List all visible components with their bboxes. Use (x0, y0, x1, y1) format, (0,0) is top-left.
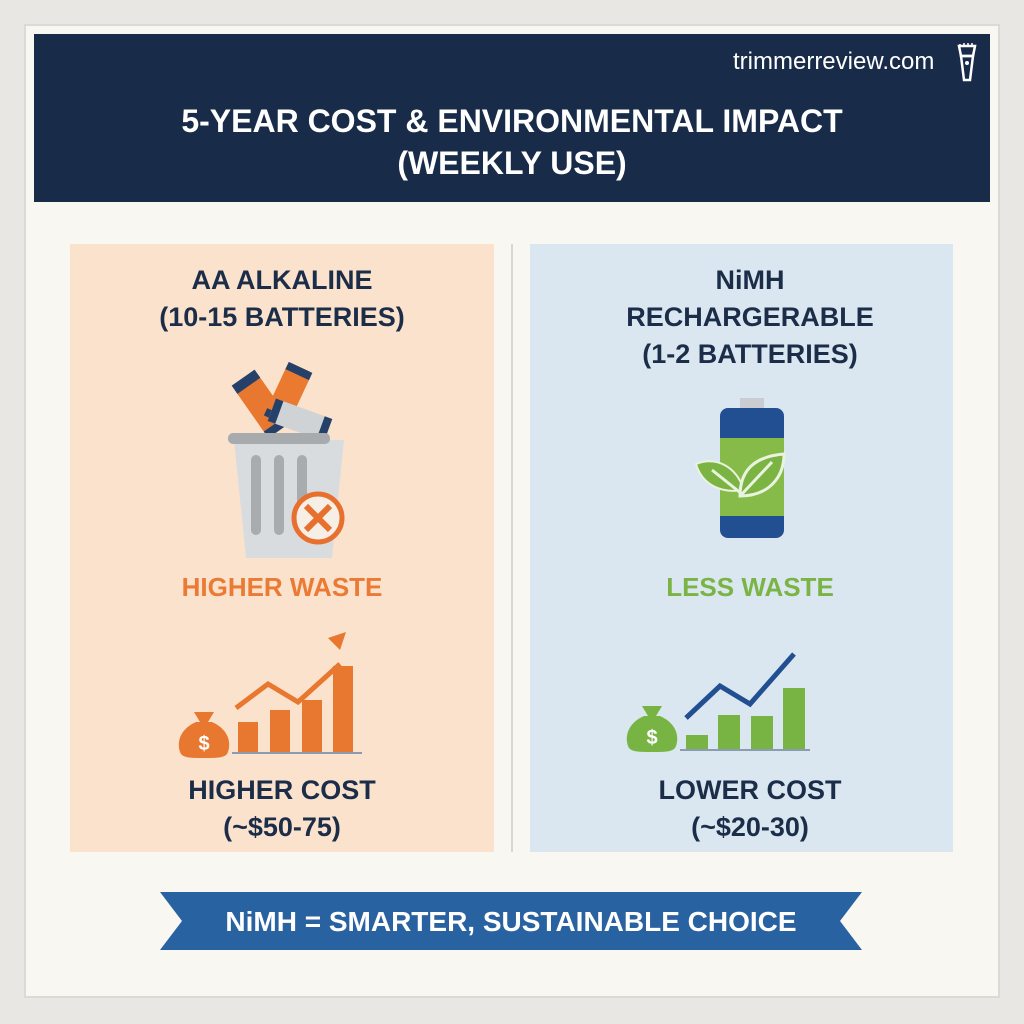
label: lower cost: (~$20-30) (691, 812, 809, 842)
label: less waste: LESS WASTE (666, 572, 834, 602)
title: (WEEKLY USE) (397, 145, 627, 181)
heading (626, 265, 874, 369)
icon: trimmer (958, 43, 976, 82)
heading: NiMH (716, 265, 784, 295)
heading (159, 265, 405, 332)
header (34, 34, 990, 202)
heading: (1-2 BATTERIES) (642, 339, 858, 369)
label: higher waste: HIGHER WASTE (182, 572, 382, 602)
heading: RECHARGERABLE (626, 302, 874, 332)
chart: rising cost (178, 632, 362, 758)
banner (160, 892, 862, 950)
icon: trash with batteries (228, 362, 344, 558)
title (181, 103, 843, 181)
logo: trimmerreview.com (733, 48, 934, 75)
panel: alkaline (70, 244, 494, 852)
chart: lower cost: $ (646, 727, 658, 749)
logo (733, 43, 976, 82)
heading: (10-15 BATTERIES) (159, 302, 405, 332)
chart: rising cost: $ (198, 733, 210, 755)
chart: lower cost (626, 652, 810, 752)
icon: eco battery (695, 398, 786, 538)
heading: AA ALKALINE (192, 265, 372, 295)
label: higher cost: (~$50-75) (223, 812, 341, 842)
label: higher cost (188, 775, 376, 842)
label: lower cost (658, 775, 842, 842)
banner: NiMH = SMARTER, SUSTAINABLE CHOICE (225, 906, 797, 937)
label: higher cost: HIGHER COST (188, 775, 376, 805)
title: 5-YEAR COST & ENVIRONMENTAL IMPACT (181, 103, 843, 139)
panel: nimh (530, 244, 953, 852)
label: lower cost: LOWER COST (658, 775, 842, 805)
